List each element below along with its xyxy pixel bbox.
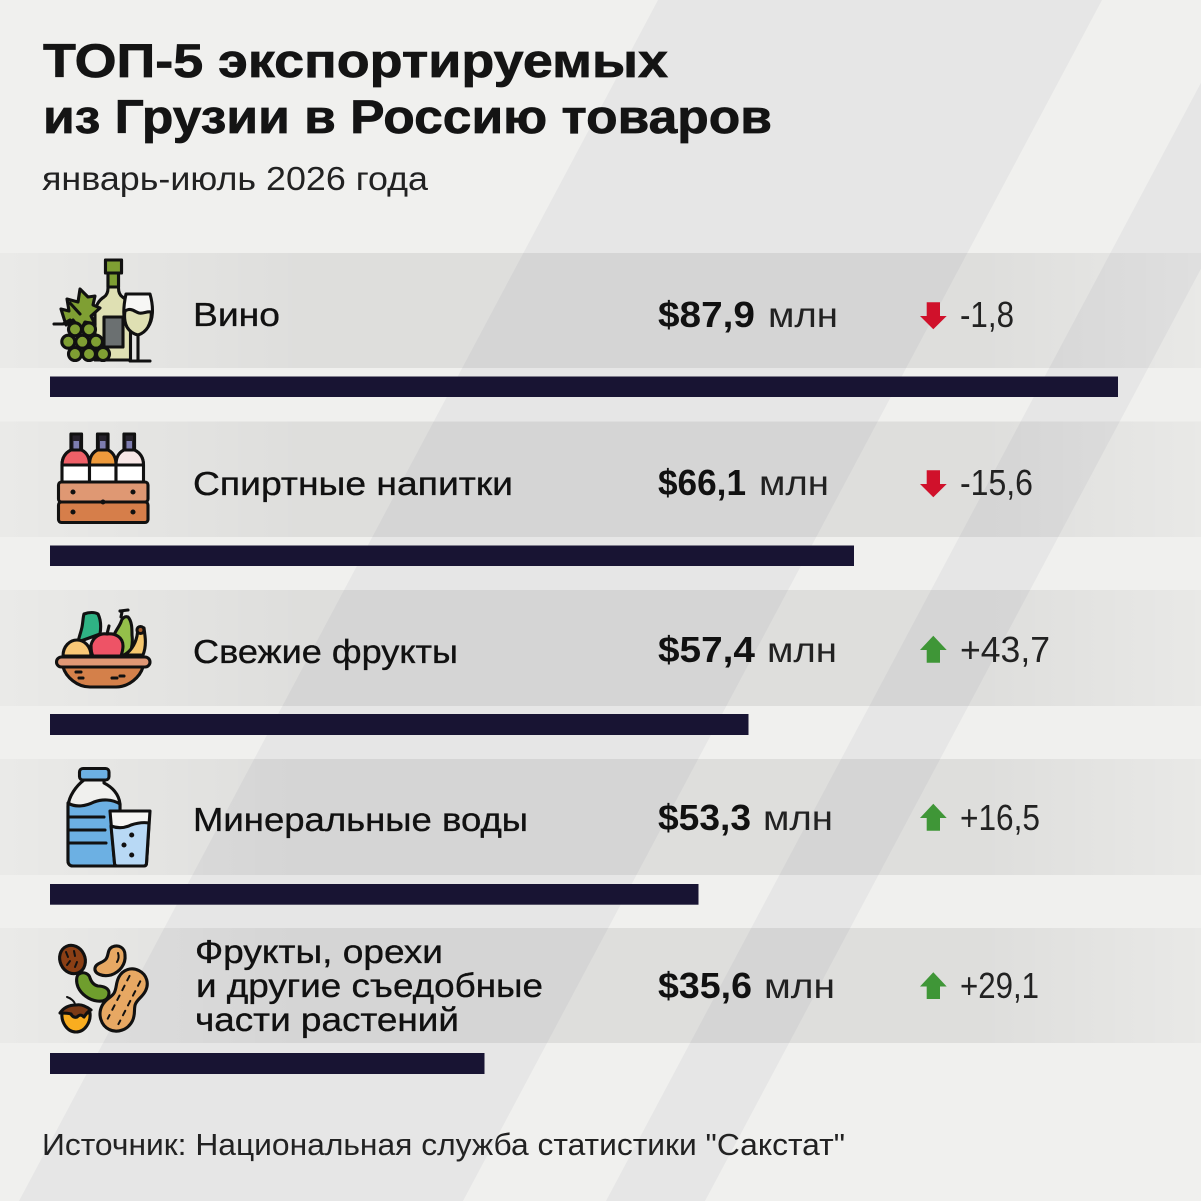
row: fruits, nuts and other edible parts <box>50 934 1039 1074</box>
source note: Источник: Национальная служба статистики "Сакстат" <box>42 1127 845 1162</box>
subtitle: январь-июль 2026 года <box>42 161 428 198</box>
bar <box>50 546 854 566</box>
row: mineral water <box>50 768 1040 905</box>
label: fruits, nuts and other edible parts: части растений <box>195 1002 459 1039</box>
value: млн <box>759 464 829 503</box>
value <box>658 797 833 838</box>
title: из Грузии в Россию товаров <box>43 90 772 143</box>
change: +16,5 <box>960 797 1040 838</box>
title <box>43 34 772 143</box>
value: $57,4 <box>658 629 755 670</box>
icon: water bottle and glass <box>68 768 150 866</box>
row: wine <box>50 260 1118 397</box>
change: -1,8 <box>960 294 1014 335</box>
value: млн <box>763 799 833 838</box>
arrow: up <box>920 636 947 663</box>
label: wine: Вино <box>193 297 280 334</box>
label: fruits, nuts and other edible parts: Фрукты, орехи <box>195 934 443 971</box>
value: млн <box>768 296 838 335</box>
value <box>658 965 835 1006</box>
arrow: up <box>920 804 947 831</box>
label: spirits: Спиртные напитки <box>193 466 513 503</box>
bar <box>50 1053 484 1074</box>
label: fresh fruit: Свежие фрукты <box>193 634 458 671</box>
value: млн <box>764 967 835 1006</box>
value <box>658 294 838 335</box>
arrow: down <box>920 470 947 497</box>
title: ТОП-5 экспортируемых <box>43 34 668 87</box>
row: fresh fruit <box>50 610 1050 735</box>
value: $53,3 <box>658 797 751 838</box>
label: fruits, nuts and other edible parts: и другие съедобные <box>196 968 543 1005</box>
value: $66,1 <box>658 462 746 503</box>
change: +29,1 <box>960 965 1039 1006</box>
icon: three bottles in a crate <box>58 434 148 522</box>
value <box>658 462 829 503</box>
bar <box>50 714 748 735</box>
arrow: up <box>920 972 947 999</box>
bar <box>50 884 698 905</box>
change: -15,6 <box>960 462 1033 503</box>
change: +43,7 <box>960 629 1050 670</box>
icon: nuts <box>55 941 154 1037</box>
icon: fruit bowl <box>56 610 150 687</box>
arrow: down <box>920 302 947 329</box>
value: $35,6 <box>658 965 752 1006</box>
label: mineral water: Минеральные воды <box>193 802 528 839</box>
icon: wine bottle, grapes and glass <box>54 260 152 361</box>
value: $87,9 <box>658 294 755 335</box>
value <box>658 629 837 670</box>
value: млн <box>767 631 837 670</box>
row: spirits <box>50 434 1033 566</box>
label: fruits, nuts and other edible parts <box>195 934 543 1039</box>
bar <box>50 376 1118 397</box>
